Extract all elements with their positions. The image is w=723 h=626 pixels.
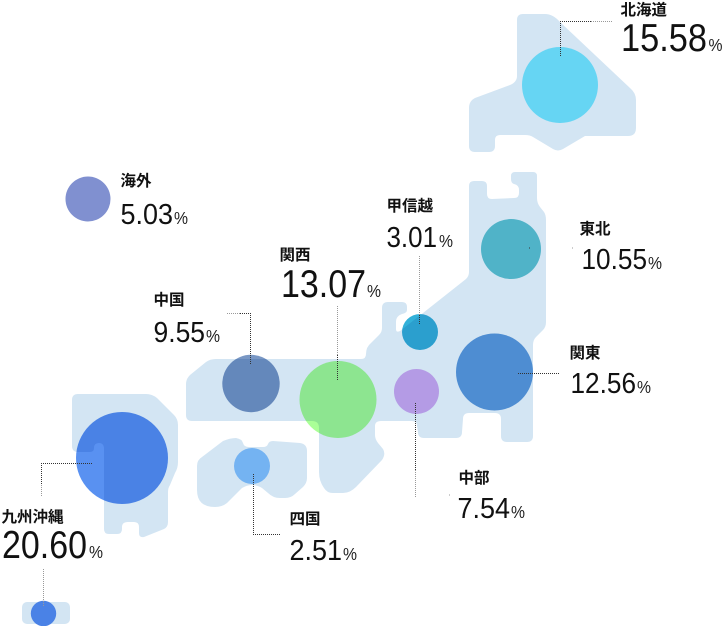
label: Shikoku 2.51%: 四国	[290, 511, 321, 528]
bubble: Kansai	[300, 361, 376, 438]
label: Chubu 7.54%: 中部	[458, 469, 490, 487]
label: Kyushu Okinawa 20.60%: %	[89, 542, 103, 562]
land: Shikoku	[197, 438, 307, 507]
label: Chugoku 9.55%: %	[206, 326, 220, 346]
label: Overseas 5.03%: 海外	[120, 171, 152, 190]
bubble: Chubu	[394, 369, 439, 414]
label: Kyushu Okinawa 20.60%: 20.60	[2, 524, 87, 567]
land: Honshu	[186, 172, 546, 493]
label: Kansai 13.07%: %	[367, 281, 381, 301]
label: Chugoku 9.55%	[154, 291, 220, 349]
label: Shikoku 2.51%	[290, 511, 357, 567]
label: Kansai 13.07%: 13.07	[281, 263, 366, 306]
bubble: Kanto	[456, 334, 533, 410]
bubble: Overseas	[66, 176, 110, 222]
label: Chugoku 9.55%: 中国	[154, 291, 185, 309]
label: Shikoku 2.51%: %	[343, 544, 357, 564]
label: Overseas 5.03%: 5.03	[120, 199, 173, 231]
bubble: Tohoku	[481, 219, 541, 279]
land: Okinawa	[22, 602, 70, 624]
label: Chubu 7.54%	[458, 469, 525, 525]
label: Overseas 5.03%	[120, 171, 188, 231]
label: Chugoku 9.55%: 9.55	[154, 317, 205, 349]
label: Tohoku 10.55%: 10.55	[582, 244, 647, 276]
bubble: Okinawa	[31, 601, 56, 626]
leader lines	[42, 22, 612, 606]
label: Tohoku 10.55%	[580, 219, 662, 276]
label: Koshinetsu 3.01%: 3.01	[386, 222, 437, 254]
bubble: Kyushu	[76, 412, 168, 504]
label: Kansai 13.07%	[280, 246, 381, 306]
label: Tohoku 10.55%: %	[648, 253, 662, 273]
label: Hokkaido 15.58%: 15.58	[621, 17, 707, 60]
label: Kanto 12.56%: %	[637, 377, 651, 397]
label: Shikoku 2.51%: 2.51	[290, 535, 342, 567]
label: Chubu 7.54%: 7.54	[458, 493, 510, 525]
label: Hokkaido 15.58%	[620, 1, 722, 60]
label: Koshinetsu 3.01%: %	[439, 231, 453, 251]
label: Hokkaido 15.58%: 北海道	[620, 1, 668, 19]
label: Kanto 12.56%: 関東	[570, 343, 601, 362]
bubble: Shikoku	[234, 448, 270, 484]
label: Koshinetsu 3.01%	[386, 197, 453, 254]
bubble: Chugoku	[222, 355, 280, 412]
label: Tohoku 10.55%: 東北	[580, 219, 611, 238]
label: Koshinetsu 3.01%: 甲信越	[386, 197, 434, 215]
land: Kyushu	[72, 394, 178, 537]
bubble: Koshinetsu	[402, 314, 438, 350]
label: Kanto 12.56%: 12.56	[570, 368, 636, 400]
label: Chubu 7.54%: %	[511, 502, 525, 522]
bubble: Hokkaido	[522, 47, 598, 123]
label: Overseas 5.03%: %	[174, 208, 188, 228]
label: Kansai 13.07%: 関西	[280, 246, 311, 264]
land: Hokkaido	[469, 14, 636, 152]
label: Kyushu Okinawa 20.60%: 九州沖縄	[2, 508, 64, 526]
label: Kanto 12.56%	[570, 343, 651, 400]
